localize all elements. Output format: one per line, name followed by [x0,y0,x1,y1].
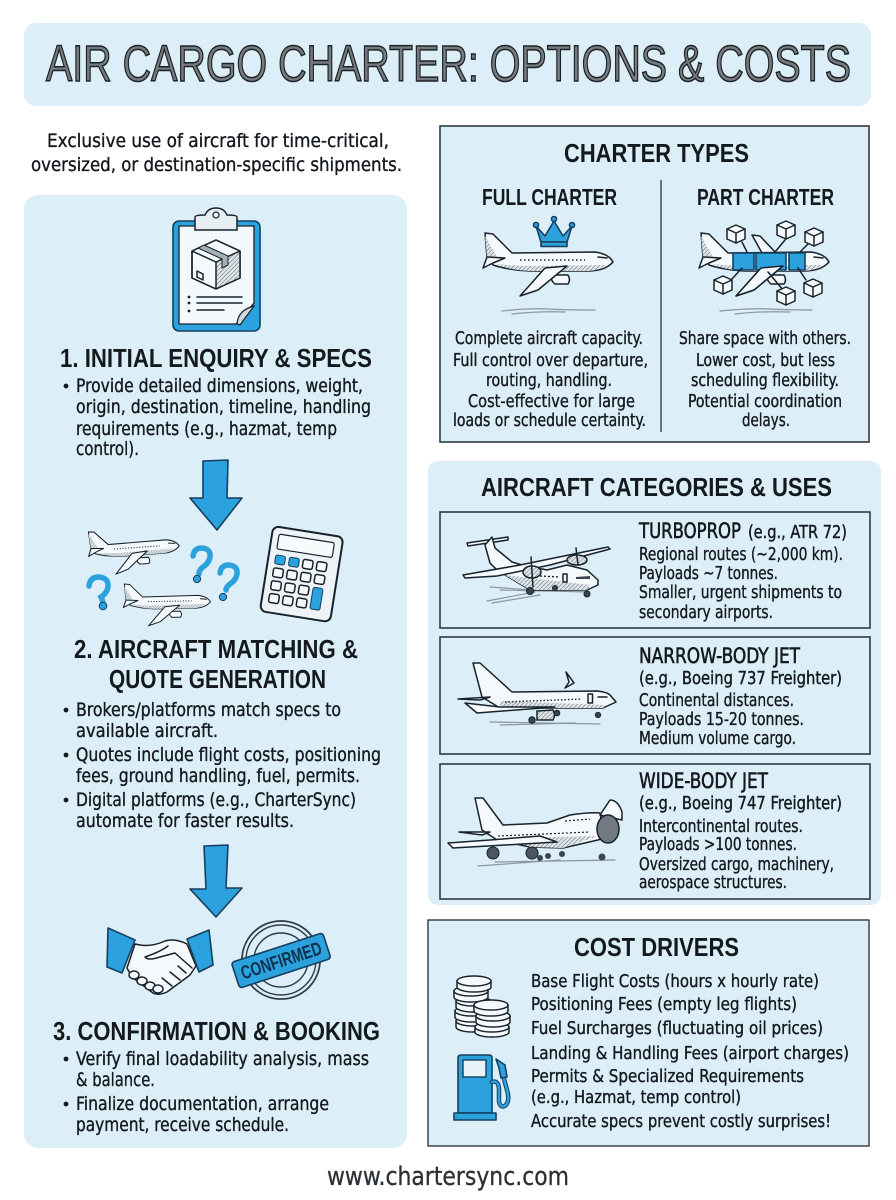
text: step 3 bullets: & balance. [76,1069,155,1091]
text: cost driver list: Base Flight Costs (hours x hourly rate) [531,972,819,992]
text: part charter description: scheduling flexibility. [691,371,839,391]
intro text [31,130,402,176]
icon: handshake [107,928,213,994]
icon: plane with shared cargo boxes [699,221,829,314]
text: wide-body details: (e.g., Boeing 747 Freighter) [639,793,842,814]
text: part charter description: Lower cost, but less [696,351,835,371]
text: wide-body details [639,769,842,893]
text: part charter description [679,329,851,431]
panel: charter types [440,126,869,442]
text: full charter description: Cost-effective for large [468,392,635,412]
text: wide-body details: Intercontinental routes. [639,817,803,837]
text: step 2 bullets [64,699,381,832]
text: part charter description: delays. [742,411,790,431]
icon: narrow-body aircraft [458,663,616,725]
text: part charter description: Potential coordination [688,392,842,412]
text: wide-body details: Oversized cargo, machinery, [639,855,834,875]
icon: clipboard with parcel [173,208,260,331]
text: full charter description [453,329,648,431]
text: cost driver list: Accurate specs prevent costly surprises! [531,1112,831,1132]
icon: confirmed stamp: CONFIRMED [238,938,325,984]
text: wide-body details: aerospace structures. [639,873,787,893]
icon: aircraft options with question marks [87,526,237,626]
text: turboprop details: Payloads ~7 tonnes. [639,564,778,584]
panel: booking process steps [24,195,407,1148]
text: wide-body details: WIDE-BODY JET [639,769,768,793]
heading: step 1: 1. INITIAL ENQUIRY & SPECS [60,343,372,373]
heading: charter types: CHARTER TYPES [564,138,749,168]
text: turboprop details: Smaller, urgent shipments to [639,583,842,603]
text: step 3 bullets: payment, receive schedule. [76,1114,289,1136]
text: step 3 bullets: Verify final loadability analysis, mass [76,1048,369,1070]
heading: step 3: 3. CONFIRMATION & BOOKING [53,1016,380,1046]
text: full charter description: Complete aircraft capacity. [455,329,643,349]
text: wide-body details: Payloads >100 tonnes. [639,835,797,855]
icon: wide-body aircraft [448,798,622,866]
arrow: step 2 to 3 [190,845,242,917]
heading: part charter: PART CHARTER [697,184,834,210]
panel: cost drivers [428,920,869,1146]
intro text: oversized, or destination-specific shipments. [31,154,402,176]
text: cost driver list [531,972,849,1132]
text: full charter description: routing, handling. [486,371,612,391]
icon: confirmed stamp [231,921,331,999]
text: cost driver list: Permits & Specialized Requirements [531,1067,804,1087]
icon: calculator [260,526,343,622]
text: step 1 bullets: control). [76,438,139,460]
text: step 2 bullets: fees, ground handling, fuel, permits. [76,765,360,787]
text: cost driver list: Fuel Surcharges (fluctuating oil prices) [531,1019,823,1039]
icon: question marks [89,548,237,604]
text: step 3 bullets: Finalize documentation, arrange [76,1093,329,1115]
text: narrow-body details: (e.g., Boeing 737 Freighter) [639,668,842,689]
text: step 1 bullets: Provide detailed dimensions, weight, [76,375,363,397]
text: turboprop details: secondary airports. [639,603,773,623]
text: cost driver list: Landing & Handling Fees (airport charges) [531,1044,849,1064]
text: step 2 bullets: Digital platforms (e.g., CharterSync) [76,789,356,811]
text: step 1 bullets: requirements (e.g., hazmat, temp [76,418,337,440]
text: step 2 bullets: available aircraft. [76,720,218,742]
icon: turboprop aircraft [463,537,610,603]
text: narrow-body details [639,644,842,749]
card: narrow-body jet [440,637,870,754]
title banner [24,23,871,106]
text: narrow-body details: Medium volume cargo. [639,729,796,749]
text: turboprop details: Regional routes (~2,000 km). [639,545,843,565]
text: narrow-body details: NARROW-BODY JET [639,644,800,668]
text: cost driver list: (e.g., Hazmat, temp control) [531,1088,741,1108]
text: step 1 bullets [64,375,371,460]
text: turboprop details [638,519,847,623]
icon: plane two [123,582,211,626]
heading: cost drivers: COST DRIVERS [574,932,739,962]
text: turboprop details: TURBOPROP [638,519,741,543]
heading: aircraft categories: AIRCRAFT CATEGORIES & USES [481,472,832,502]
heading: full charter: FULL CHARTER [482,184,617,210]
text: narrow-body details: Continental distances. [639,691,794,711]
panel: aircraft categories [428,461,881,905]
icon: coin stacks [454,976,510,1037]
text: step 1 bullets: origin, destination, timeline, handling [76,396,371,418]
icon: plane one [87,526,181,576]
text: cost driver list: Positioning Fees (empty leg flights) [531,995,797,1015]
heading: step 2: 2. AIRCRAFT MATCHING & [74,634,358,664]
text: narrow-body details: Payloads 15-20 tonnes. [639,710,804,730]
text: step 3 bullets [64,1048,369,1136]
text: full charter description: Full control over departure, [453,351,648,371]
arrow: step 1 to 2 [190,460,242,530]
text: full charter description: loads or schedule certainty. [453,411,646,431]
text: step 2 bullets: Brokers/platforms match specs to [76,699,341,721]
card: turboprop [440,512,870,628]
text: part charter description: Share space with others. [679,329,851,349]
icon: fuel pump [454,1055,508,1120]
icon: plane with crown [483,216,613,314]
heading: step 2 [74,634,358,694]
text: turboprop details: (e.g., ATR 72) [748,522,847,543]
text: step 2 bullets: automate for faster results. [76,810,294,832]
text: step 2 bullets: Quotes include flight costs, positioning [76,744,381,766]
intro text: Exclusive use of aircraft for time-critical, [47,130,389,152]
footer url: www.chartersync.com [327,1162,569,1192]
heading: step 2: QUOTE GENERATION [109,664,326,694]
card: wide-body jet [440,764,870,899]
